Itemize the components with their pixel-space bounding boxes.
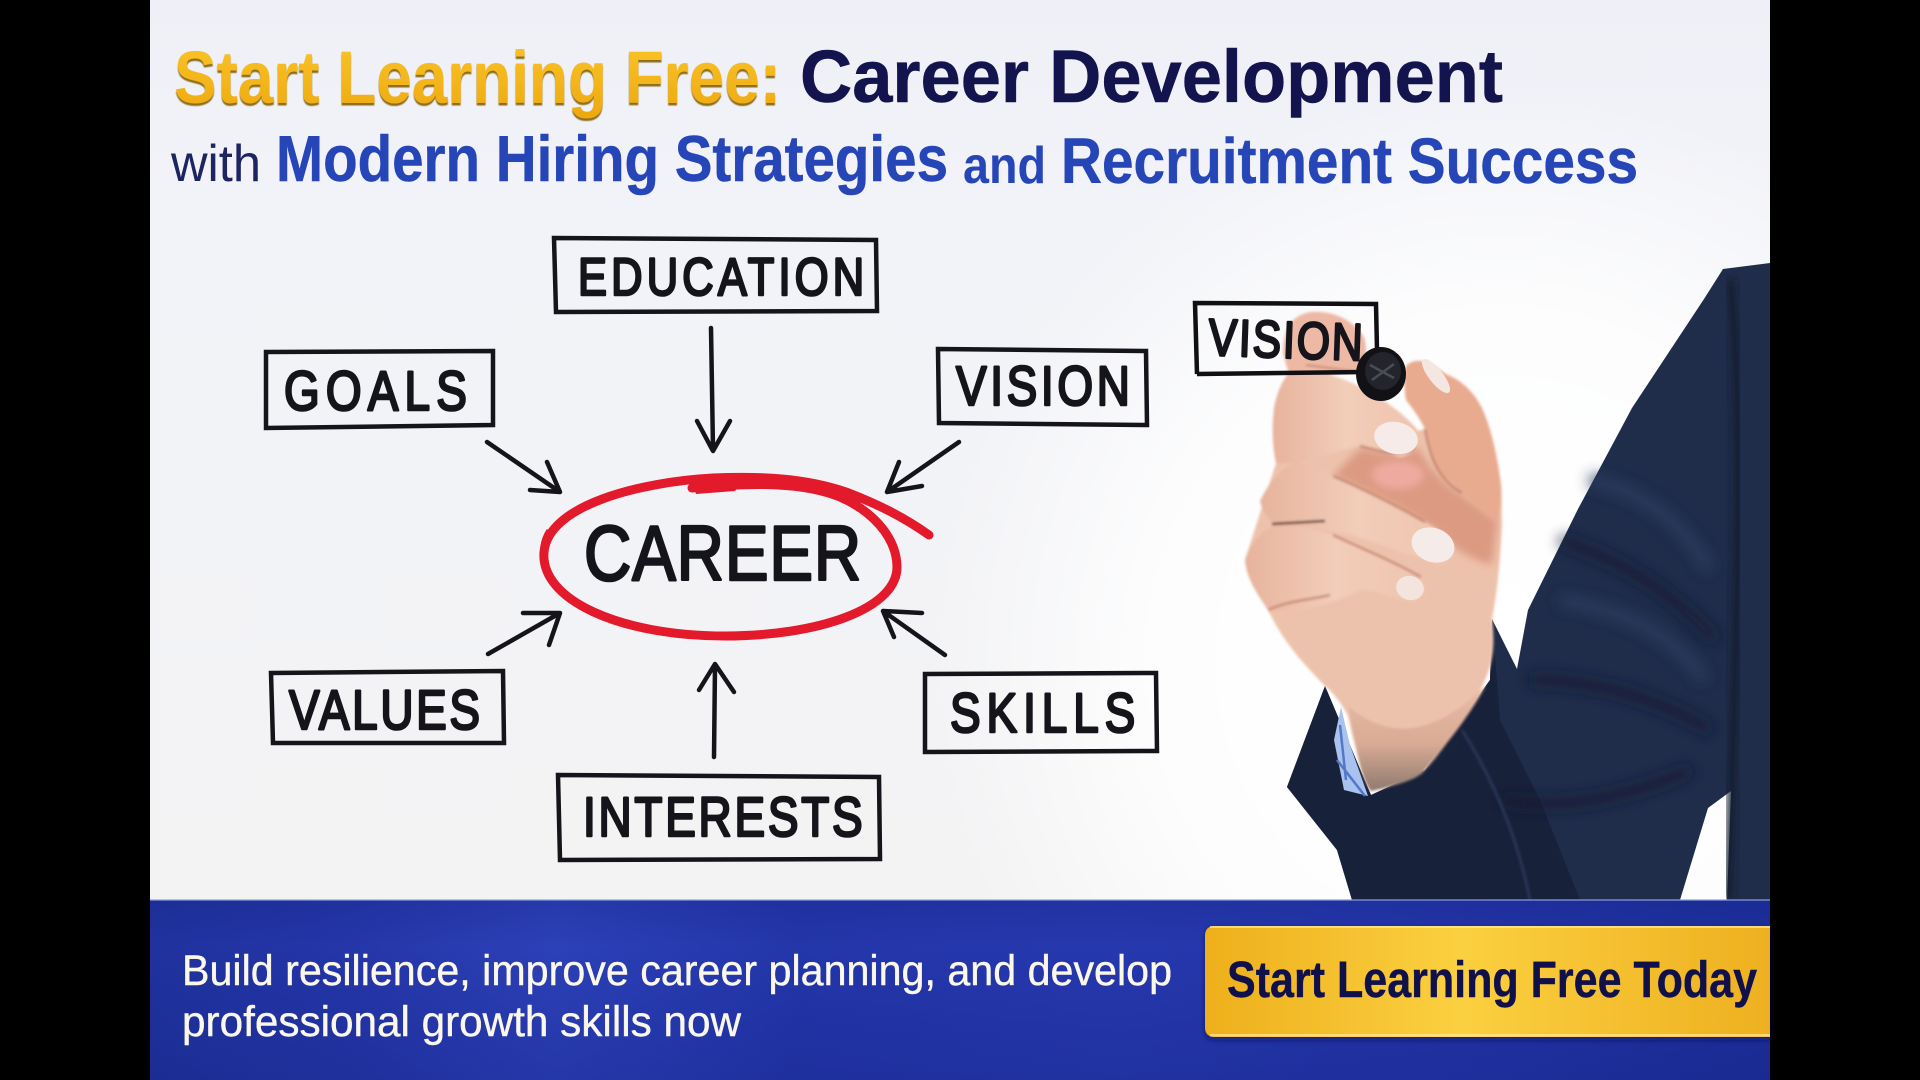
- jacket sleeve and body: [1287, 263, 1770, 900]
- cta button: Start Learning Free Today: [1227, 951, 1758, 1008]
- written vision box: VISION: [1208, 309, 1364, 372]
- shirt cuff: [1334, 707, 1368, 796]
- marker tip: [1356, 347, 1406, 401]
- bottom banner: [150, 899, 1770, 1080]
- gap between fingers: [1333, 447, 1498, 565]
- wrist shading: [1348, 685, 1486, 791]
- title line 2: Recruitment Success: [1061, 125, 1638, 197]
- banner text: [182, 947, 1172, 1046]
- banner text: professional growth skills now: [182, 998, 742, 1046]
- title line 1: Career Development: [800, 35, 1503, 118]
- middle finger: [1258, 470, 1437, 546]
- hand: [1245, 312, 1502, 791]
- nails: [1374, 359, 1454, 600]
- title line 2: with: [170, 135, 261, 193]
- box: skills: [925, 673, 1157, 752]
- index finger: [1273, 372, 1418, 463]
- title line 2: and: [963, 137, 1046, 195]
- red circle around career: [542, 477, 929, 636]
- banner text: Build resilience, improve career planning, and develop: [182, 947, 1172, 995]
- title: [170, 35, 1638, 197]
- box: skills: SKILLS: [950, 682, 1135, 744]
- arrow: interests to career: [699, 664, 734, 757]
- slide background: [150, 0, 1770, 900]
- title line 2: Modern Hiring Strategies: [276, 122, 948, 195]
- career mind map: [266, 238, 1157, 860]
- box: goals: [266, 351, 493, 428]
- arrow: goals to career: [487, 442, 560, 492]
- box: interests: INTERESTS: [583, 786, 863, 848]
- finger creases: [1268, 429, 1462, 610]
- fingertip behind box: [1283, 312, 1366, 378]
- box: vision: VISION: [956, 355, 1130, 417]
- career label: CAREER: [584, 511, 861, 597]
- arrow: skills to career: [883, 611, 945, 655]
- cta button: [1205, 926, 1770, 1037]
- box: interests: [558, 775, 880, 860]
- ring finger: [1244, 530, 1376, 609]
- thumb: [1404, 361, 1501, 522]
- photo: hand writing vision: [1195, 263, 1770, 900]
- title line 1: [174, 35, 1503, 119]
- arrow: values to career: [488, 613, 560, 654]
- title line 2: [170, 122, 1638, 197]
- box: vision: [938, 349, 1147, 425]
- palm base: [1245, 429, 1502, 791]
- box: values: VALUES: [289, 679, 480, 741]
- box: education: EDUCATION: [578, 248, 864, 307]
- arrow: vision to career: [887, 442, 959, 492]
- arrow: education to career: [697, 328, 730, 451]
- box: goals: GOALS: [284, 360, 467, 422]
- title line 1: Start Learning Free:: [174, 36, 781, 119]
